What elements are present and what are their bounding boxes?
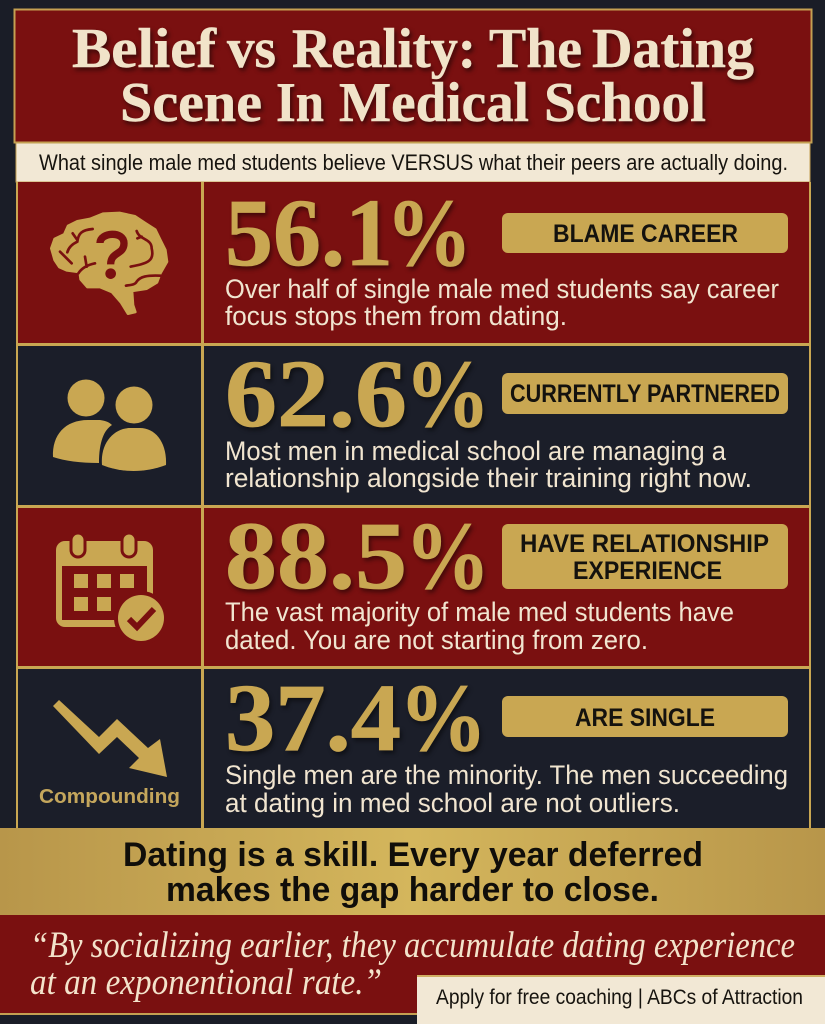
label: currently partnered: CURRENTLY PARTNERED: [510, 380, 780, 408]
description: Single men are the minority. The men succeeding: [225, 760, 788, 790]
stat: 56.1%: 56.1: [225, 179, 393, 286]
label: blame career: BLAME CAREER: [553, 220, 738, 248]
icon: calendar with check: [56, 533, 168, 645]
title: Medical: [339, 72, 529, 134]
title: Dating: [592, 18, 754, 80]
stat: 88.5%: [225, 502, 490, 609]
stat: 37.4%: [225, 664, 487, 771]
title: Belief: [72, 18, 217, 80]
icon: compounding down arrow: [53, 700, 167, 777]
description: [225, 597, 734, 655]
icon: two people: [53, 380, 166, 471]
stat: 62.6%: %: [405, 340, 490, 447]
title: Scene: [120, 72, 262, 134]
panel: blame career: [17, 179, 810, 344]
panel: are single: [17, 664, 810, 828]
label: currently partnered: [502, 373, 788, 414]
label: are single: [502, 696, 788, 737]
stat: 56.1%: %: [386, 179, 472, 286]
panel: relationship experience: [17, 502, 810, 668]
title: The: [489, 18, 582, 80]
stat: 88.5%: 88.5: [225, 502, 407, 609]
description: dated. You are not starting from zero.: [225, 625, 648, 655]
quote text: at an exponentional rate.”: [30, 962, 382, 1003]
title: vs: [227, 18, 276, 80]
title: [72, 18, 754, 134]
description: [225, 436, 752, 493]
icon: brain with question mark: [51, 213, 167, 314]
description: [225, 274, 779, 331]
callout: dating is a skill: [0, 828, 825, 915]
callout: dating is a skill: makes the gap harder to close.: [166, 871, 659, 909]
title: Reality:: [292, 18, 476, 80]
description: Over half of single male med students say career: [225, 274, 779, 304]
panel: currently partnered: [17, 340, 810, 506]
stat: 37.4%: %: [399, 664, 487, 771]
panel: title: [14, 10, 812, 142]
callout: dating is a skill: Dating is a skill. Every year deferred: [123, 836, 703, 874]
panel: quote: [0, 915, 825, 1015]
label: have relationship experience: HAVE RELATIONSHIP: [520, 530, 769, 558]
description: focus stops them from dating.: [225, 301, 567, 331]
stat: 62.6%: [225, 340, 490, 447]
footer call to action: [417, 975, 825, 1024]
label: blame career: [502, 213, 788, 253]
description: at dating in med school are not outliers.: [225, 788, 680, 818]
label: are single: ARE SINGLE: [575, 704, 715, 732]
icon label: compounding: Compounding: [39, 786, 180, 808]
stat: 62.6%: 62.6: [225, 340, 407, 447]
title: School: [544, 72, 706, 134]
title: In: [276, 72, 324, 134]
description: [225, 760, 788, 818]
quote text: [30, 925, 795, 1003]
description: Most men in medical school are managing a: [225, 436, 727, 466]
label: have relationship experience: [502, 524, 788, 589]
label: have relationship experience: EXPERIENCE: [573, 557, 722, 585]
stat: 88.5%: %: [405, 502, 490, 609]
stat: 56.1%: [225, 179, 472, 286]
description: relationship alongside their training right now.: [225, 463, 752, 493]
description: The vast majority of male med students have: [225, 597, 734, 627]
stat: 37.4%: 37.4: [225, 664, 401, 771]
subtitle band: [16, 143, 810, 182]
